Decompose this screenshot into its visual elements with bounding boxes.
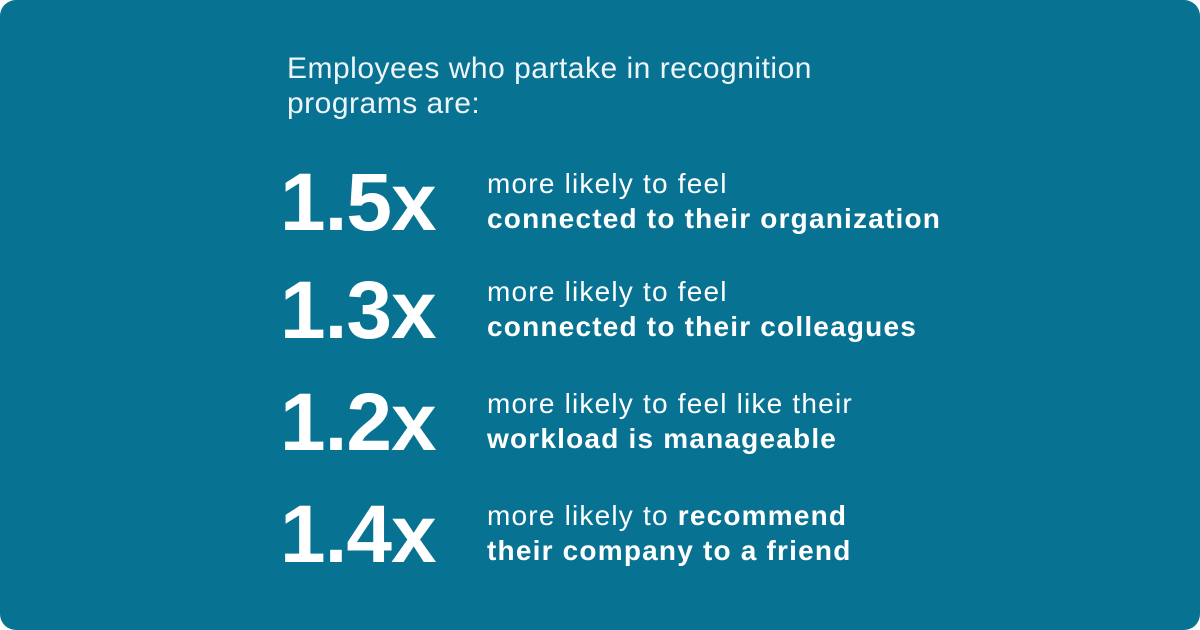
- title: [287, 52, 812, 120]
- stat text: their company to a friend: [487, 535, 852, 566]
- stat text: [486, 388, 853, 454]
- title: programs are:: [287, 87, 480, 120]
- stat text: more likely to feel: [487, 276, 728, 307]
- stat text: [487, 276, 917, 342]
- row: 1.5x: [280, 157, 941, 248]
- row: 1.3x: [280, 265, 917, 356]
- stat text: workload is manageable: [487, 423, 837, 454]
- stat number: 1.5x: [280, 157, 436, 248]
- stat text: [487, 500, 852, 566]
- stat text: more likely to feel: [487, 168, 728, 199]
- stat number: 1.2x: [280, 377, 436, 468]
- row: 1.4x: [280, 489, 852, 580]
- stat number: 1.3x: [280, 265, 436, 356]
- row: 1.2x: [280, 377, 853, 468]
- title: Employees who partake in recognition: [287, 52, 812, 85]
- stat text: connected to their organization: [487, 203, 941, 234]
- stat text: more likely to feel like their: [487, 388, 853, 419]
- stat number: 1.4x: [280, 489, 436, 580]
- stat text: connected to their colleagues: [487, 311, 917, 342]
- stat text: [487, 168, 941, 234]
- stat text: more likely to recommend: [487, 500, 847, 531]
